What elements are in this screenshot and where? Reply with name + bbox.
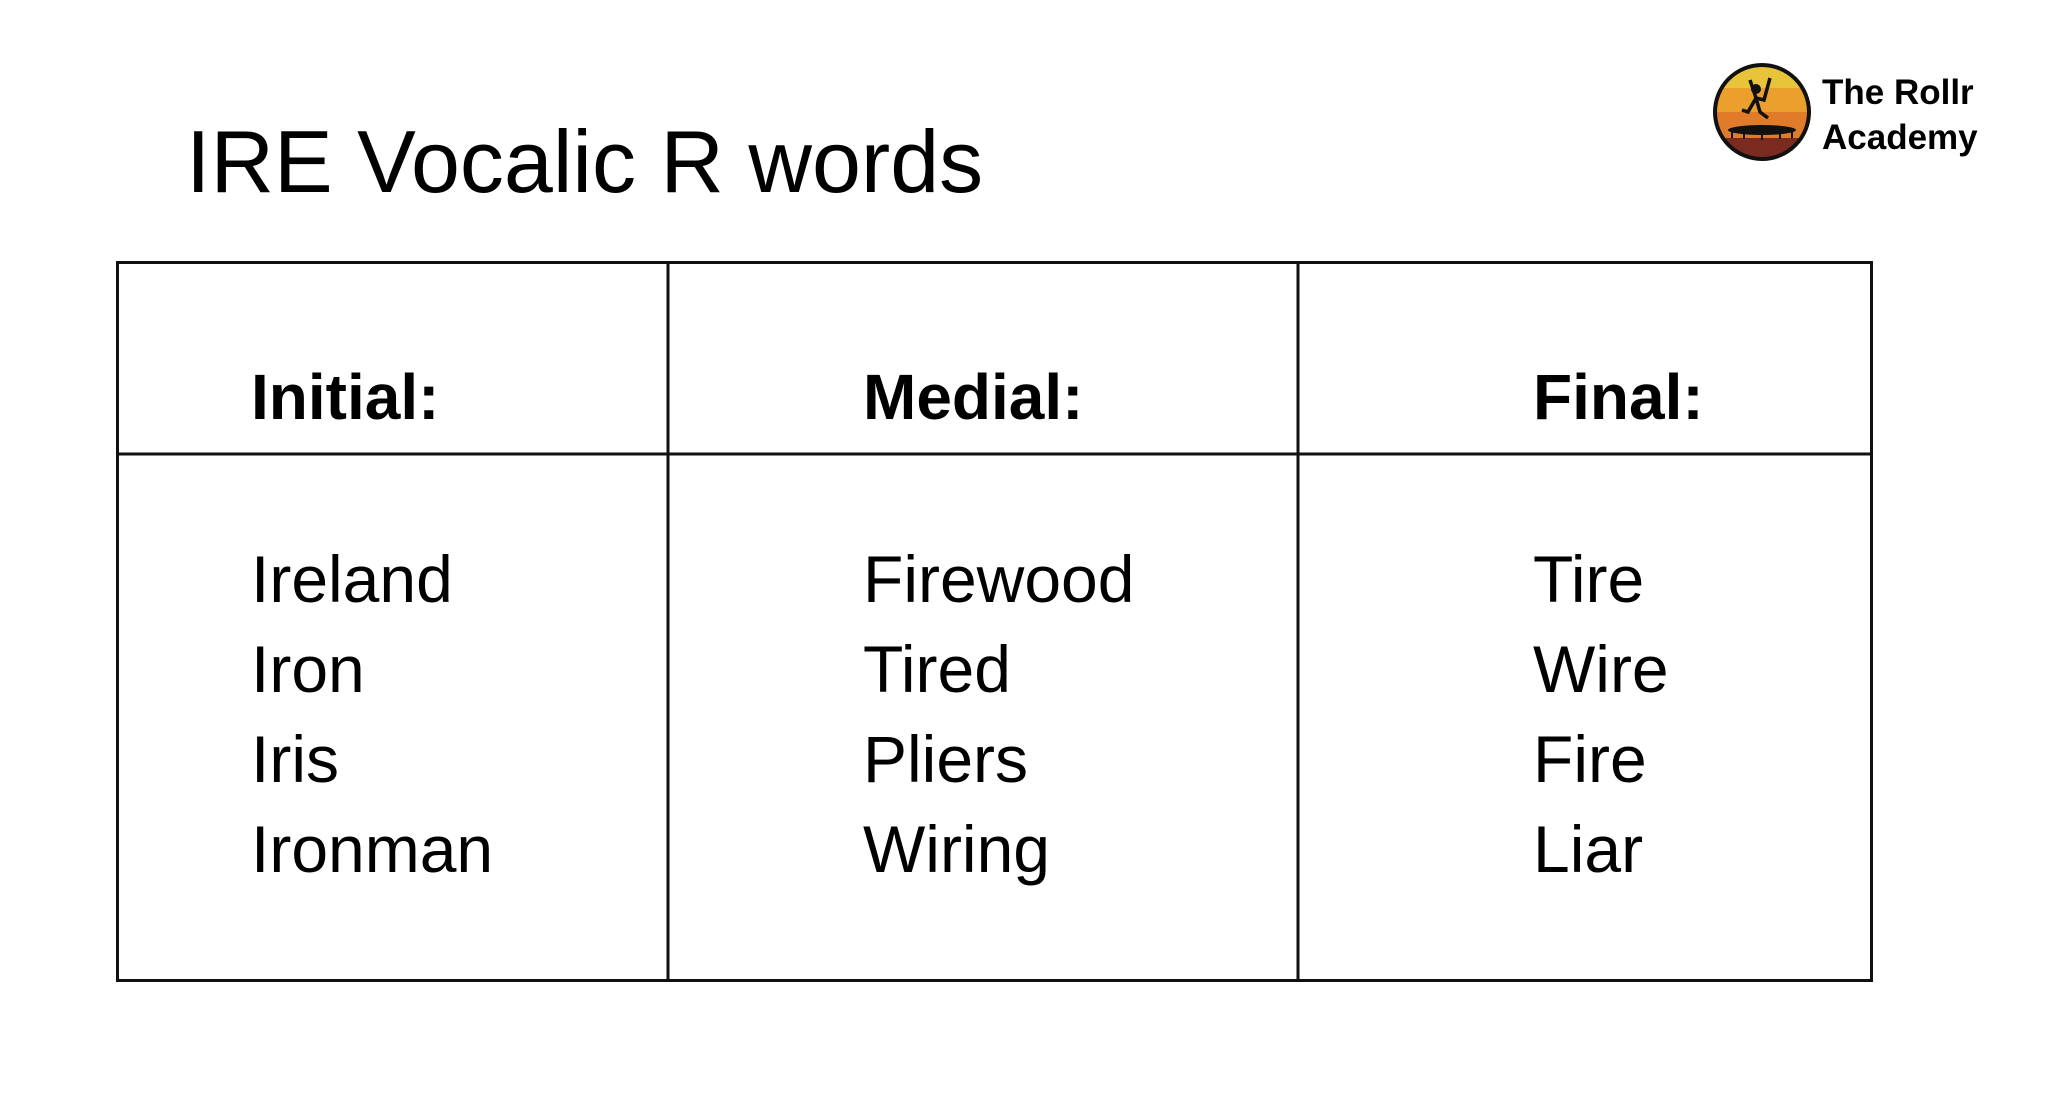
column: medial words: Pliers [863,722,1028,796]
column: final words: Wire [1533,632,1669,706]
column: final words: Tire [1533,542,1644,616]
column: initial words: Iron [251,632,365,706]
column: initial words: Ireland [251,542,453,616]
logo text: Academy [1822,118,1978,157]
logo [1713,63,1978,161]
column: final words: Liar [1533,812,1643,886]
column: initial words: Iris [251,722,339,796]
icon: sunset trampoline circle [1713,63,1811,161]
header: Initial: Initial: [251,361,439,433]
column: initial words [251,542,493,886]
logo text [1822,73,1978,157]
header: Final: Final: [1533,361,1704,433]
title: IRE Vocalic R words [186,112,983,211]
column: medial words: Wiring [863,812,1050,886]
column: initial words: Ironman [251,812,493,886]
column: medial words: Tired [863,632,1011,706]
logo text: The Rollr [1822,73,1974,112]
table [116,261,1873,982]
header: Medial: Medial: [863,361,1083,433]
column: final words: Fire [1533,722,1647,796]
column: final words [1533,542,1669,886]
column: medial words: Firewood [863,542,1134,616]
column: medial words [863,542,1134,886]
